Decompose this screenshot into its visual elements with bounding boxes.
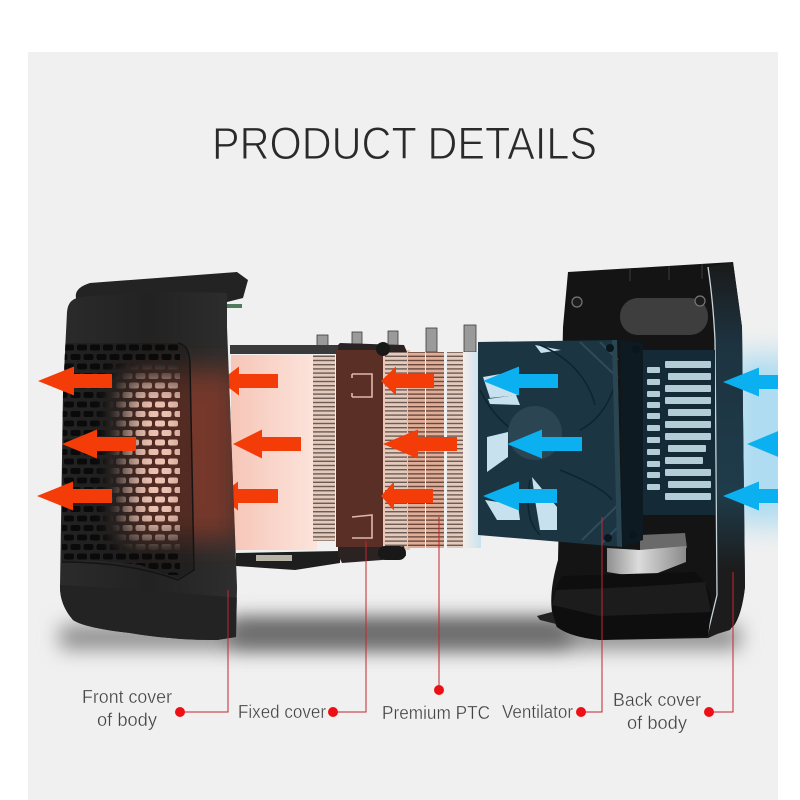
base ring (552, 582, 711, 616)
frame diagonal strut top (580, 342, 618, 378)
left fin column (313, 355, 335, 541)
grille panel edge (62, 343, 194, 580)
grille dark surround (62, 343, 194, 578)
orange heat arrows, right (381, 366, 457, 510)
motor (607, 546, 686, 578)
heat glow on body (130, 370, 240, 540)
blue air arrows, fan (483, 366, 582, 510)
floor shadow (60, 618, 740, 649)
orange heat arrows, left (37, 366, 136, 510)
white end plate (463, 352, 481, 548)
screw holes (572, 296, 710, 613)
frame diagonal strut bottom (582, 505, 620, 543)
grille holes lit by heater (102, 364, 180, 550)
circuit board tip (226, 304, 242, 308)
pink heat panel (231, 355, 317, 550)
base housing (552, 572, 712, 640)
callout: premium PTC (382, 517, 490, 723)
front cover of body (60, 272, 248, 645)
fixed cover frame (230, 342, 407, 570)
fan hub (508, 406, 562, 460)
wires (256, 555, 292, 561)
frame right rail (612, 340, 622, 547)
connector tabs (317, 325, 476, 352)
PTC heating element (313, 325, 481, 550)
clip top (352, 374, 372, 397)
callout: ventilator (502, 517, 602, 722)
fin column 4 (447, 352, 464, 548)
base foot (537, 612, 556, 624)
base band seam (60, 585, 240, 645)
lower bar (236, 551, 340, 570)
white seam (707, 267, 717, 636)
cover plate (338, 343, 407, 563)
blade highlights and air gaps (483, 345, 561, 530)
vent slots (647, 361, 711, 500)
fin column 1 (385, 352, 407, 548)
callout: premium PTC: Premium PTC (382, 703, 490, 723)
vent panel (643, 350, 715, 515)
title: PRODUCT DETAILS (212, 118, 597, 169)
orange heat arrows, behind front cover (220, 366, 301, 510)
back cover of body (537, 262, 745, 640)
callout: fixed cover: Fixed cover (238, 702, 326, 722)
callout: front cover of body: Front cover (82, 687, 172, 707)
grille holes dark (60, 343, 180, 575)
motor top (640, 533, 687, 553)
callout: back cover of body: Back cover (613, 690, 701, 710)
screw top (376, 342, 390, 356)
clip bottom (352, 515, 372, 538)
blade edges (480, 345, 615, 535)
callout: fixed cover (238, 541, 366, 722)
callout: back cover of body (613, 572, 733, 733)
ventilator fan (478, 340, 643, 547)
callout: back cover of body: of body (627, 713, 687, 733)
back cover shell (551, 262, 745, 640)
callout: ventilator: Ventilator (502, 702, 573, 722)
callout: front cover of body (82, 590, 228, 730)
brown cover face (336, 350, 383, 547)
fin column 3 (426, 352, 444, 548)
body shell (60, 292, 237, 640)
fan side frame (620, 340, 643, 547)
blue air glow (742, 339, 778, 541)
callout: front cover of body: of body (97, 710, 157, 730)
screw bottom (378, 546, 406, 560)
blue air arrows, rear (723, 368, 778, 510)
top tabs (630, 264, 702, 281)
pink inner strip (382, 350, 410, 550)
top bar (230, 345, 342, 354)
corner screws (604, 344, 640, 542)
fan dark body (478, 340, 622, 547)
side edge (707, 262, 745, 637)
grey pad (620, 298, 708, 335)
top cap (76, 272, 248, 302)
fin column 2 (408, 352, 425, 548)
